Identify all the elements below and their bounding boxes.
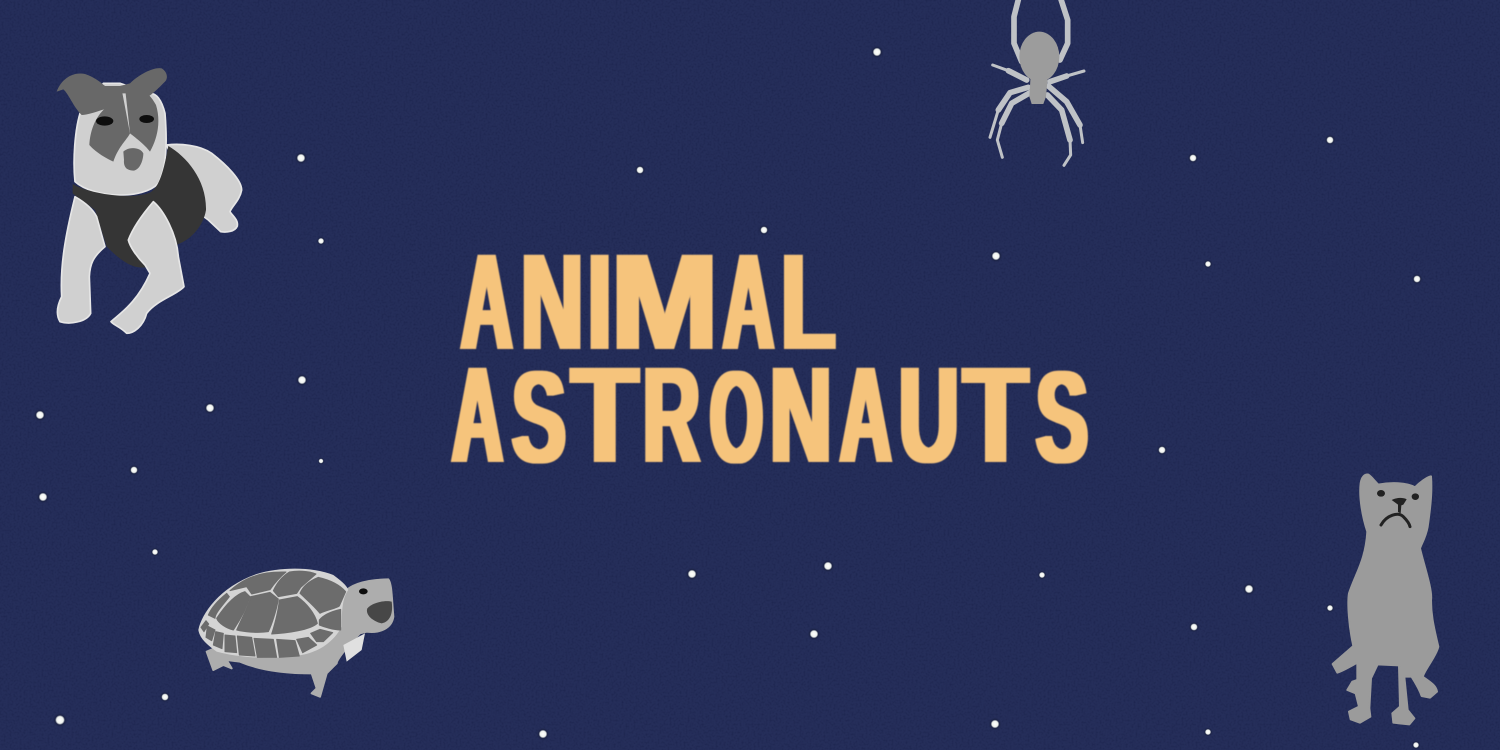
title: Animal Astronauts: R	[643, 339, 700, 492]
title: Animal Astronauts: M	[611, 226, 718, 379]
title: Animal Astronauts: O	[710, 344, 763, 491]
title: Animal Astronauts: A	[452, 339, 503, 492]
title: Animal Astronauts: N	[521, 226, 583, 379]
icon: spider	[990, 0, 1084, 165]
title: Animal Astronauts: L	[781, 226, 835, 379]
title: Animal Astronauts: A	[723, 226, 774, 379]
title: Animal Astronauts: U	[899, 339, 959, 492]
title: Animal Astronauts: N	[770, 339, 831, 492]
title: Animal Astronauts: T	[571, 339, 639, 492]
title: Animal Astronauts: S	[512, 344, 566, 491]
title: Animal Astronauts: A	[840, 339, 891, 492]
icon: stray dog looking up	[1333, 475, 1438, 724]
title: Animal Astronauts: A	[461, 226, 512, 379]
title: Animal Astronauts: I	[588, 226, 611, 379]
title: Animal Astronauts: T	[963, 339, 1028, 492]
title: Animal Astronauts: S	[1036, 344, 1088, 491]
icon: tortoise	[198, 569, 393, 697]
icon: dog in harness	[57, 68, 242, 333]
